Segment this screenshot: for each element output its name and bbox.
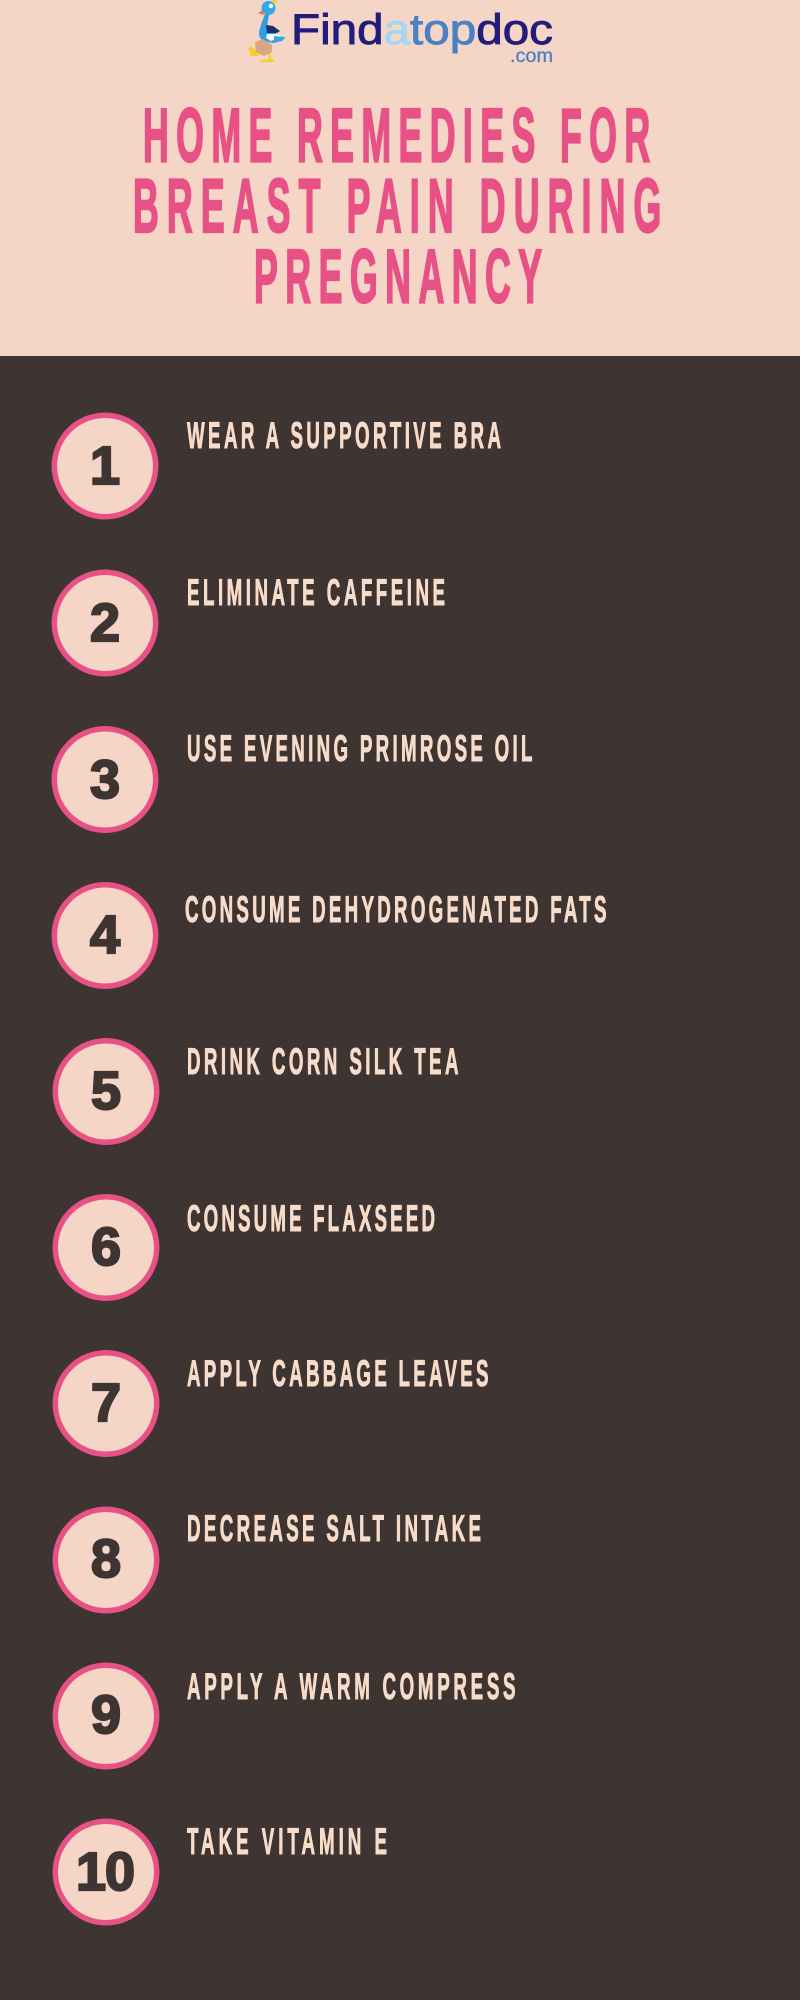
number badge 4 [54, 885, 156, 986]
title [133, 92, 661, 319]
number badge 6: 6 [91, 1217, 121, 1277]
title: BREAST PAIN DURING [133, 163, 661, 249]
number badge 9: 9 [91, 1685, 121, 1745]
item 2: eliminate caffeine [54, 572, 445, 674]
item 4: consume dehydrogenated fats [54, 885, 607, 986]
item 3: use evening primrose oil [54, 728, 533, 830]
item 9: apply a warm compress [55, 1665, 516, 1767]
number badge 4: 4 [90, 905, 120, 965]
number badge 1 [54, 415, 156, 517]
number badge 6 [55, 1197, 157, 1298]
item text 5: DRINK CORN SILK TEA [187, 1041, 458, 1083]
number badge 2 [54, 572, 156, 674]
number badge 10 [55, 1821, 157, 1923]
number badge 1: 1 [90, 436, 120, 496]
item 10: take vitamin e [55, 1821, 387, 1923]
logo: Findatopdoc [248, 0, 553, 67]
number badge 8: 8 [91, 1529, 121, 1589]
logo wordmark: Findatopdoc [291, 6, 553, 54]
item text 3: USE EVENING PRIMROSE OIL [187, 728, 532, 770]
number badge 8 [55, 1509, 157, 1611]
icon: duck mascot [248, 0, 285, 62]
number badge 7 [55, 1353, 157, 1454]
number badge 5: 5 [91, 1061, 121, 1121]
item 5: drink corn silk tea [55, 1041, 459, 1142]
number badge 9 [55, 1665, 157, 1767]
item text 4: CONSUME DEHYDROGENATED FATS [185, 889, 607, 931]
item 8: decrease salt intake [55, 1508, 481, 1611]
item text 6: CONSUME FLAXSEED [187, 1198, 435, 1240]
item text 2: ELIMINATE CAFFEINE [187, 572, 445, 614]
number badge 2: 2 [90, 593, 120, 653]
logo suffix: .com [510, 46, 553, 67]
item text 8: DECREASE SALT INTAKE [187, 1508, 481, 1550]
title: HOME REMEDIES FOR [143, 92, 650, 178]
panel: header background [0, 0, 800, 356]
number badge 10: 10 [76, 1842, 134, 1902]
item text 9: APPLY A WARM COMPRESS [187, 1666, 515, 1708]
item 1: wear a supportive bra [54, 415, 501, 517]
item 6: consume flaxseed [55, 1197, 435, 1298]
number badge 3 [54, 729, 156, 830]
item 7: apply cabbage leaves [55, 1353, 489, 1454]
item text 10: TAKE VITAMIN E [187, 1821, 387, 1863]
title: PREGNANCY [254, 233, 542, 319]
item text 7: APPLY CABBAGE LEAVES [187, 1353, 488, 1395]
number badge 5 [55, 1041, 157, 1142]
item text 1: WEAR A SUPPORTIVE BRA [187, 415, 501, 457]
number badge 7: 7 [91, 1373, 121, 1433]
number badge 3: 3 [90, 750, 120, 810]
